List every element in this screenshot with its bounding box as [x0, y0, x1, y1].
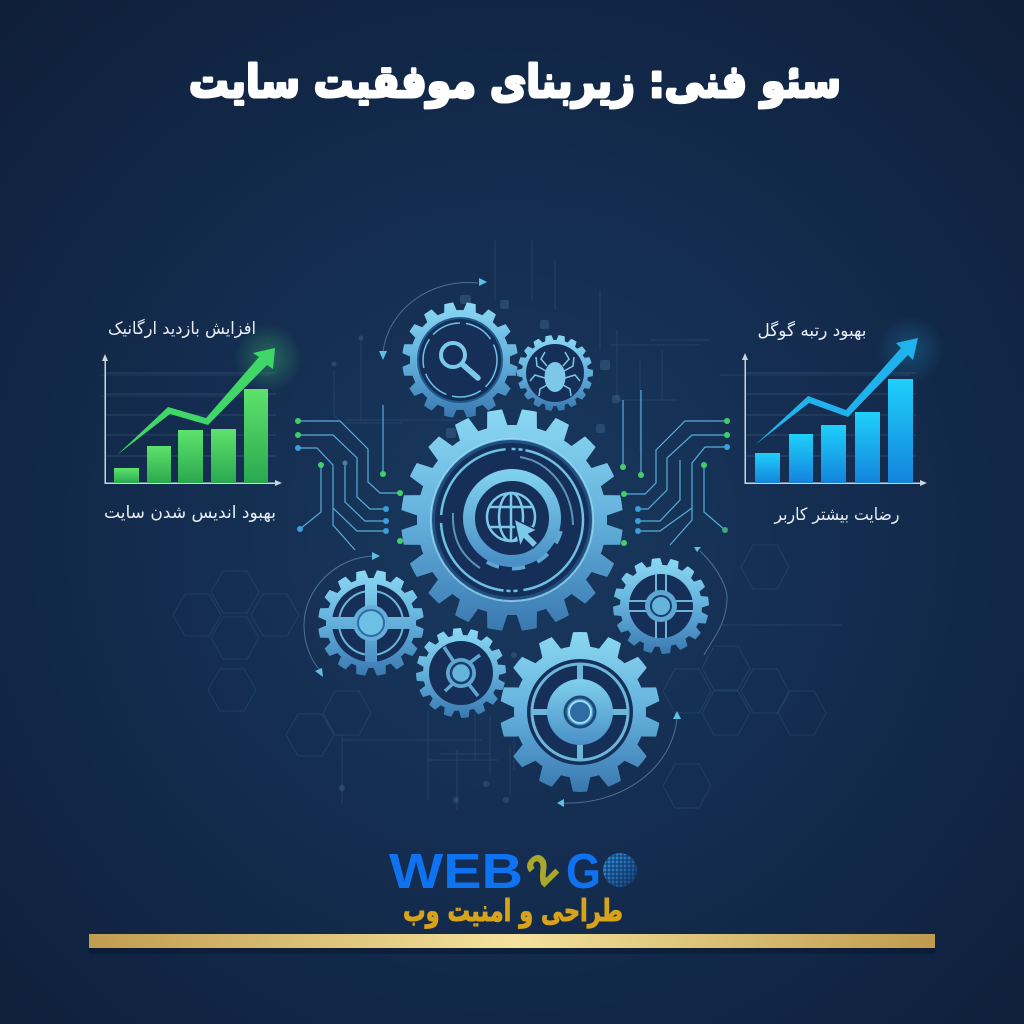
inner arc ticks — [453, 457, 573, 568]
label: google rank: بهبود رتبه گوگل — [758, 320, 866, 341]
label: user satisfaction: رضایت بیشتر کاربر — [774, 505, 900, 525]
left circuit traces — [295, 405, 403, 550]
logo: WEB2GO: WEB — [389, 845, 523, 899]
curved arrows around gears — [304, 278, 727, 807]
green bars — [114, 389, 268, 483]
blue bars — [755, 379, 913, 483]
title: سئو فنی: زیربنای موفقیت سایت — [189, 55, 841, 108]
panel: right blue growth chart — [742, 316, 944, 486]
panel: left green growth chart — [102, 318, 302, 486]
arrow heads — [315, 278, 701, 807]
right circuit dots — [620, 418, 730, 546]
logo tagline: طراحی و امنیت وب — [403, 894, 623, 929]
gold bottom bar — [89, 934, 935, 954]
icon: dotted sphere — [603, 853, 637, 887]
grid lines — [746, 373, 916, 456]
icon: spider — [530, 352, 580, 396]
logo: WEB2GO: G — [566, 845, 601, 899]
blue trend arrow — [755, 338, 918, 445]
logo: WEB2GO: 2 — [516, 844, 566, 894]
gear: left spoke gear — [318, 570, 424, 676]
label: site indexing: بهبود اندیس شدن سایت — [104, 503, 276, 523]
icon: magnifier — [441, 343, 478, 378]
axes — [742, 353, 927, 486]
logo: WEB2GO — [389, 853, 637, 888]
gear: main web gear — [401, 409, 623, 631]
axes — [102, 354, 282, 486]
glow behind blue arrow — [876, 316, 944, 384]
inner segmented ring — [441, 449, 583, 591]
gear: large bottom gear — [500, 632, 660, 792]
grid lines — [106, 373, 276, 456]
gear: search — [402, 302, 518, 418]
background hexagons — [173, 545, 826, 808]
inner gear ring — [452, 458, 572, 578]
background faint circuit lines — [100, 240, 910, 810]
gear: small spoke gear — [416, 628, 506, 718]
green trend arrow — [117, 348, 275, 455]
icon: globe with cursor — [487, 493, 538, 548]
label: organic traffic: افزایش بازدید ارگانیک — [108, 318, 256, 339]
glow behind green arrow — [234, 324, 302, 392]
gear: spider — [517, 335, 593, 411]
right circuit traces — [620, 390, 730, 546]
gear: right spoke gear — [613, 558, 709, 654]
left circuit dots — [295, 418, 403, 544]
